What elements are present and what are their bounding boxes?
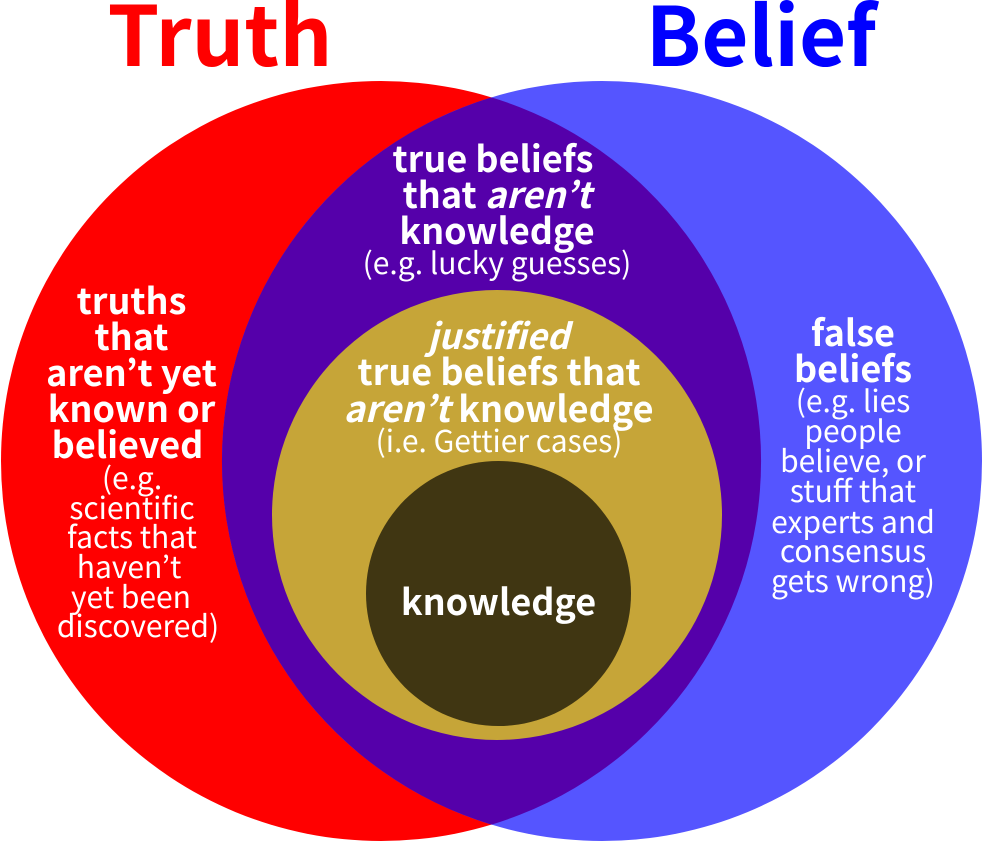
text: truths not yet known: (e.g. [102,454,162,498]
text: false beliefs: consensus [780,527,926,571]
venn circle: Truth [1,81,761,841]
text: true beliefs that aren't knowledge: (e.g. lucky guesses) [363,239,631,283]
text: knowledge: knowledge [401,574,596,626]
text: false beliefs: gets wrong) [771,557,935,601]
text: false beliefs: experts and [771,498,935,542]
text: truths not yet known: known or [48,381,216,433]
text: truths not yet known [46,273,219,646]
text: truths not yet known: that [95,309,168,361]
circle: justified true beliefs [272,290,722,740]
text: truths not yet known: yet been [71,573,191,617]
text: justified true beliefs that aren't knowledge [343,309,654,461]
text: false beliefs: false [811,305,895,357]
text: false beliefs [771,305,935,601]
venn overlap: true beliefs [222,97,761,825]
text: true beliefs that aren't knowledge: that aren’t [403,167,595,219]
text: false beliefs: (e.g. lies [796,377,910,421]
text: justified true beliefs that aren't knowledge: (i.e. Gettier cases) [376,417,622,461]
text: truths not yet known: believed [52,417,203,469]
text: false beliefs: believe, or [780,437,926,481]
text: false beliefs: stuff that [790,467,916,511]
text: truths not yet known: facts that [67,513,197,557]
text: true beliefs that aren't knowledge: knowledge [399,203,595,255]
text: justified true beliefs that aren't knowledge: justified [424,309,574,360]
circle: knowledge [366,461,631,726]
text: justified true beliefs that aren't knowledge: true beliefs that [357,344,641,396]
text: justified true beliefs that aren't knowledge: aren’t knowledge [343,381,654,433]
text: truths not yet known: haven’t [77,543,181,587]
text: true beliefs that aren't knowledge [363,131,631,283]
text: false beliefs: beliefs [794,341,912,393]
text: false beliefs: people [804,407,902,451]
text: true beliefs that aren't knowledge: true beliefs [393,131,593,183]
venn circle: Belief [222,81,982,841]
text: truths not yet known: truths [77,273,186,325]
text: truths not yet known: aren’t yet [46,345,217,397]
text: truths not yet known: discovered) [57,602,219,646]
text: truths not yet known: scientific [69,484,195,528]
